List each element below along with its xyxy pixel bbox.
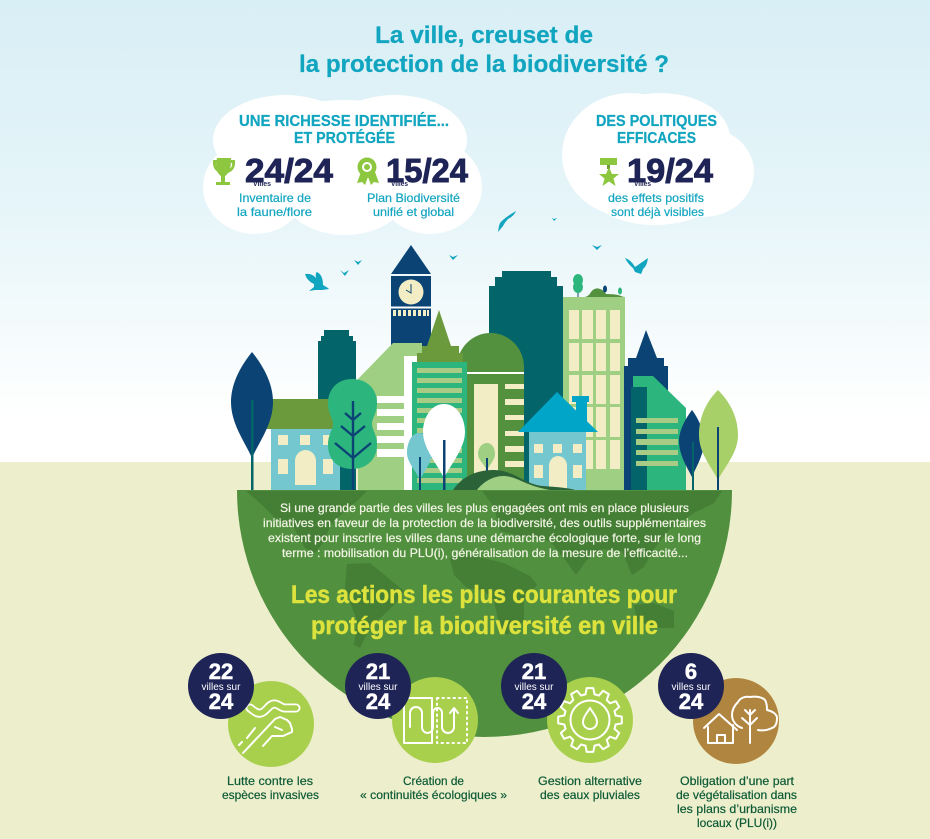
text: introduction: terme : mobilisation du PLU(i), généralisation de la mesure de l’efficacité... [282,546,688,560]
text: inventaire: la faune/flore [237,205,312,219]
text: effets positifs: sont déjà visibles [611,205,704,219]
cloud shape right [562,93,754,225]
stat: 15/24: Villes [391,179,408,188]
panel: une richesse identifiée [203,95,482,235]
teal tower left [318,330,356,491]
tree light green right [699,390,738,490]
background sky [0,0,930,463]
blue house right [518,392,598,490]
text: introduction: initiatives en faveur de la protection de la biodiversité, des outils supplémentaires [263,516,706,530]
heading: une richesse: UNE RICHESSE IDENTIFIÉE... [239,111,449,130]
text: inventaire: Inventaire de [239,191,311,205]
caption: création: « continuités écologiques » [360,788,507,802]
caption: obligation [676,774,797,830]
green building right [631,376,686,490]
text: inventaire [237,191,312,219]
badge: 22 villes: 24 [209,689,234,714]
icon: medal [599,158,619,186]
badge: 21 villes: villes sur [359,682,398,693]
badge: 21 villes: 21 [366,659,390,684]
caption: lutte [222,774,319,802]
heading: les actions [291,581,677,640]
icon: house and tree [693,678,779,764]
text: plan biodiversité: Plan Biodiversité [367,191,460,205]
icon: ecological corridors [392,677,478,763]
caption: obligation: Obligation d’une part [680,774,795,788]
action: végétalisation [658,653,797,830]
text: effets positifs [608,191,704,219]
badge: 21 villes [501,653,567,719]
heading: des politiques: EFFICACES [617,130,696,147]
badge: 6 villes [658,653,724,719]
title: La ville, creuset de [375,22,593,49]
action: continuités écologiques [345,653,507,802]
caption: lutte: espèces invasives [222,788,319,802]
action: eaux pluviales [501,653,642,802]
background ground [0,462,930,839]
stat: 19/24: Villes [634,179,651,188]
icon: invasive species [228,681,314,767]
heading: des politiques [596,113,717,147]
tree navy right [679,410,704,490]
dome building [457,333,524,490]
hill foreground [453,470,575,490]
windowed tall building [563,297,625,490]
panel: des politiques efficaces [562,93,754,225]
light green building [358,343,422,490]
badge: 21 villes: 24 [366,689,391,714]
title [299,22,669,78]
tree navy left [231,352,273,490]
caption: gestion: des eaux pluviales [540,788,640,802]
small hill tree [478,443,495,478]
city skyline [231,245,738,491]
stat: 19/24: 19/24 [627,152,714,189]
caption: gestion [538,774,642,802]
rooftop garden [573,274,624,297]
caption: obligation: de végétalisation dans [676,788,797,802]
caption: lutte: Lutte contre les [227,774,313,788]
cloud shape left [203,95,482,235]
text: introduction: existent pour inscrire les villes dans une démarche écologique forte, sur le long [268,531,701,545]
icon: water gear [547,677,633,763]
world map [246,491,722,648]
stat: 24/24: 24/24 [245,152,334,189]
heading: une richesse: ET PROTÉGÉE [294,128,395,147]
green striped building [412,310,467,490]
stat: 24/24: Villes [253,179,271,188]
blue small tree [407,433,432,490]
caption: obligation: les plans d’urbanisme [677,802,797,816]
action: espèces invasives [188,653,319,802]
heading: les actions: protéger la biodiversité en ville [311,612,658,640]
heading: les actions: Les actions les plus courantes pour [291,581,677,609]
stat: 15/24: 15/24 [386,152,469,189]
badge: 6 villes: villes sur [672,682,711,693]
text: introduction: Si une grande partie des villes les plus engagées ont mis en place plusieurs [280,501,689,515]
text: plan biodiversité [367,191,460,219]
badge: 22 villes: villes sur [202,682,241,693]
text: introduction [263,501,706,560]
badge: 21 villes: 21 [522,659,546,684]
text: effets positifs: des effets positifs [608,191,704,205]
heading: une richesse [239,111,449,147]
badge: 6 villes: 6 [685,659,697,684]
badge: 22 villes [188,653,254,719]
caption: création [360,774,507,802]
caption: obligation: locaux (PLU(i)) [697,816,777,830]
heading: des politiques: DES POLITIQUES [596,113,717,130]
caption: création: Création de [403,774,464,788]
hemisphere globe [237,490,732,737]
navy tower right [624,330,668,490]
clock tower [391,245,431,348]
caption: gestion: Gestion alternative [538,774,642,788]
icon: trophy [213,158,235,185]
birds [305,211,648,291]
title: la protection de la biodiversité ? [299,51,669,78]
text: plan biodiversité: unifié et global [373,205,454,219]
badge: 21 villes: villes sur [515,682,554,693]
white drop tree [423,404,465,490]
badge: 22 villes: 22 [209,659,233,684]
badge: 6 villes: 24 [679,689,704,714]
left house [261,399,340,490]
round green tree [328,379,377,490]
badge: 21 villes [345,653,411,719]
icon: rosette [357,158,379,185]
tall teal tower centre [489,271,563,490]
badge: 21 villes: 24 [522,689,547,714]
